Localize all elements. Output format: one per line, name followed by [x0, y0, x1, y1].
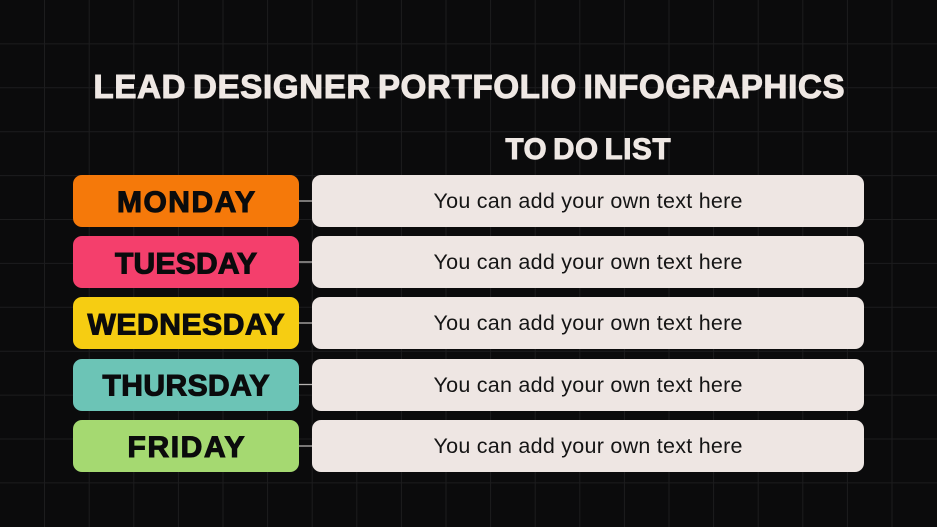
row: wednesday [73, 297, 864, 349]
row: tuesday [73, 236, 864, 288]
row: friday: FRIDAY [128, 431, 244, 464]
row: thursday: THURSDAY [102, 370, 270, 402]
row: monday: MONDAY [117, 186, 255, 219]
row: tuesday: You can add your own text here [434, 250, 742, 274]
row: wednesday: WEDNESDAY [88, 308, 284, 342]
row: friday [73, 420, 864, 472]
row: thursday: You can add your own text here [434, 373, 742, 397]
heading: to do list: TO DO LIST [506, 133, 670, 166]
title: LEAD DESIGNER PORTFOLIO INFOGRAPHICS [94, 68, 844, 105]
row: thursday [73, 359, 864, 411]
row: tuesday: TUESDAY [115, 248, 257, 280]
row: friday: You can add your own text here [434, 434, 742, 458]
row: monday: You can add your own text here [434, 189, 742, 213]
row: monday [73, 175, 864, 227]
row: wednesday: You can add your own text here [434, 311, 742, 335]
